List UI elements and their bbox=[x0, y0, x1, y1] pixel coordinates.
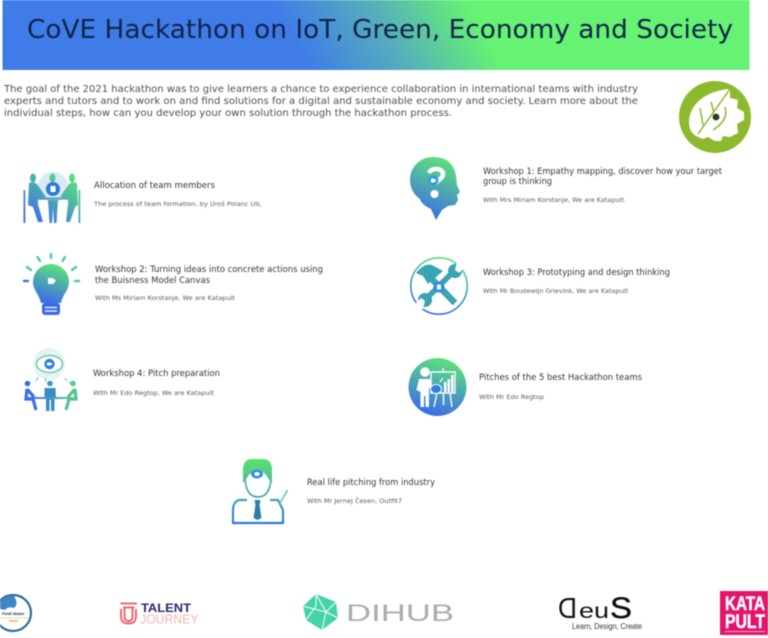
step: pitches of the 5 best teams bbox=[408, 358, 642, 416]
heading: Pitches of the 5 best Hackathon teams bbox=[479, 373, 642, 383]
step: real life pitching bbox=[233, 459, 436, 523]
intro text: experts and tutors and to work on and find solutions for a digital and sustainable economy and society. Learn more about the bbox=[4, 96, 638, 107]
step: workshop 2 bbox=[24, 254, 323, 315]
logo: Talent Journey: JOURNEY bbox=[140, 612, 199, 626]
icon: green leaf and gear logo bbox=[679, 81, 751, 153]
icon: light bulb bbox=[24, 254, 79, 315]
icon: team at table bbox=[24, 172, 80, 223]
presenter: With Ms Miriam Korstanje, We are Katapult bbox=[95, 294, 236, 302]
step: allocation of team members bbox=[24, 172, 261, 223]
step: workshop 3 bbox=[411, 258, 670, 314]
intro text: individual steps, how can you develop your own solution through the hackathon process. bbox=[4, 108, 452, 119]
presenter: With Mr Jernej Česen, Outfit7 bbox=[307, 496, 402, 505]
title banner bbox=[2, 0, 750, 70]
presenter: The process of team formation, by Uroš Polanc UIL bbox=[93, 200, 261, 208]
icon: presenter at chart board bbox=[408, 358, 466, 416]
icon: hammer and wrench in circle bbox=[411, 258, 467, 314]
intro text: The goal of the 2021 hackathon was to give learners a chance to experience collaboration in international teams with industry bbox=[3, 84, 638, 95]
logo: DeuS: eu bbox=[579, 600, 609, 623]
logo: circular badge bbox=[0, 595, 31, 631]
logo: circular badge: PoVE Water bbox=[2, 612, 25, 616]
logo: DeuS: S bbox=[610, 592, 632, 625]
heading: group is thinking bbox=[483, 177, 552, 187]
heading: the Buisness Model Canvas bbox=[95, 276, 210, 286]
heading: Real life pitching from industry bbox=[307, 478, 436, 488]
logo: DeuS: D bbox=[558, 593, 577, 625]
logo: Katapult bbox=[720, 591, 768, 635]
heading bbox=[95, 265, 323, 286]
icon: man with tie and pointer bbox=[233, 459, 288, 523]
logo: DeuS bbox=[558, 592, 642, 631]
title: CoVE Hackathon on IoT, Green, Economy and Society bbox=[27, 15, 733, 45]
logo: Talent Journey: TALENT bbox=[141, 601, 192, 615]
intro text bbox=[3, 84, 638, 119]
heading: Workshop 3: Prototyping and design thinking bbox=[483, 268, 670, 278]
heading: Allocation of team members bbox=[94, 181, 215, 191]
heading: Workshop 2: Turning ideas into concrete actions using bbox=[95, 265, 323, 275]
icon: head with question mark bbox=[410, 157, 460, 220]
heading: Workshop 4: Pitch preparation bbox=[93, 369, 220, 379]
heading bbox=[483, 167, 722, 187]
presenter: With Mrs Miriam Korstanje, We are Katapult. bbox=[483, 196, 626, 204]
logo: Talent Journey bbox=[120, 601, 199, 626]
presenter: With Mr Edo Regtop bbox=[479, 393, 544, 401]
presenter: With Mr Edo Regtop, We are Katapult bbox=[93, 389, 214, 397]
icon: people around table with thought cloud bbox=[25, 348, 76, 411]
presenter: With Mr Boudewijn Grievink, We are Katapult bbox=[483, 287, 628, 295]
logo: DeuS: Learn, Design, Create bbox=[572, 622, 642, 631]
step: workshop 4 bbox=[25, 348, 220, 411]
step: workshop 1 bbox=[410, 157, 722, 220]
heading: Workshop 1: Empathy mapping, discover how your target bbox=[483, 167, 722, 177]
logo: DIHUB: DIHUB bbox=[346, 600, 454, 627]
logo: DIHUB bbox=[303, 594, 454, 630]
